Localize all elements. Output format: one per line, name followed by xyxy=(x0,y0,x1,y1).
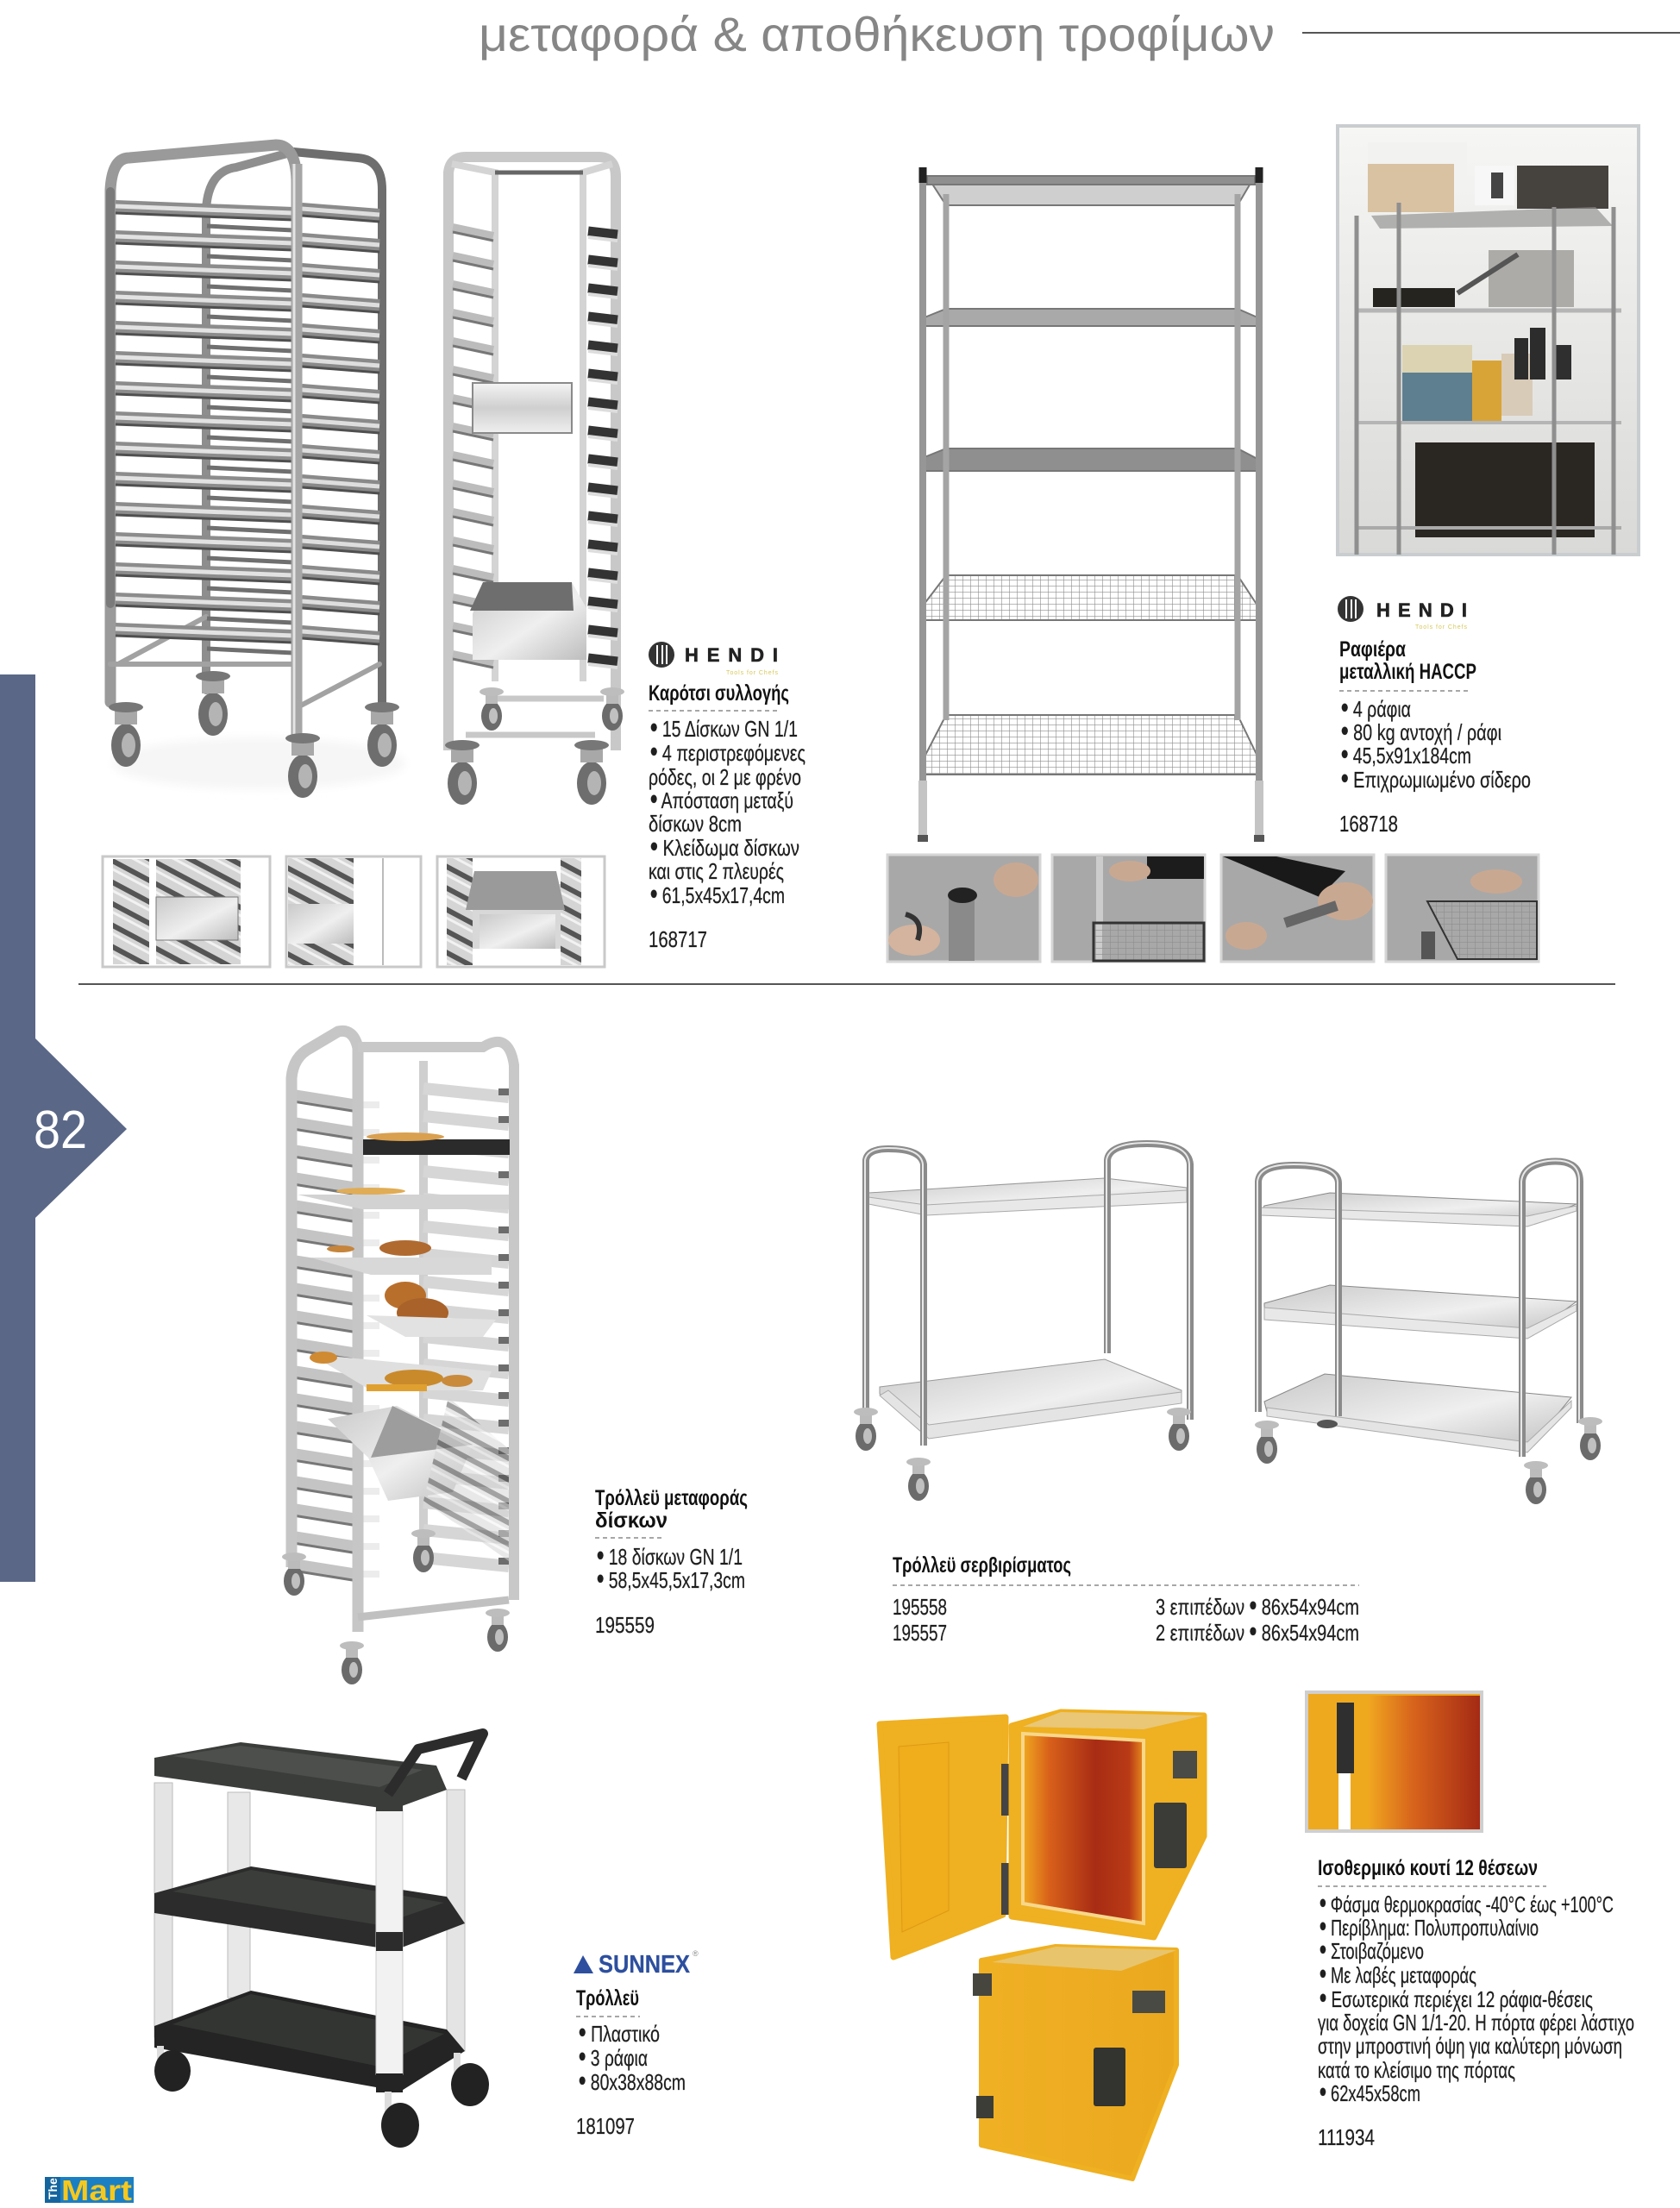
product photo: tray trolley with food xyxy=(282,1031,517,1684)
product description: 181097 xyxy=(576,2113,635,2139)
product description: • 61,5x45x17,4cm xyxy=(650,878,785,909)
product description: • 45,5x91x184cm xyxy=(1341,738,1471,769)
brand logo: SUNNEX: ® xyxy=(693,1949,699,1958)
product description: μεταλλική HACCP xyxy=(1339,660,1476,684)
logo: The Mart: Mart xyxy=(61,2174,132,2206)
product description and codes: 3 επιπέδων • 86x54x94cm xyxy=(1156,1590,1359,1621)
product description: • 3 ράφια xyxy=(579,2041,648,2072)
page number: 82 xyxy=(34,1101,87,1160)
product description xyxy=(649,681,806,952)
product description: • Στοιβαζόμενο xyxy=(1320,1934,1424,1965)
product photo: closed insulated box xyxy=(973,1947,1176,2179)
product description: • Πλαστικό xyxy=(579,2017,660,2048)
product photo: open insulated box xyxy=(880,1712,1204,1957)
product description: • 4 ράφια xyxy=(1341,692,1411,723)
page tab with page number xyxy=(0,674,127,1582)
product description: • Απόσταση μεταξύ xyxy=(650,783,793,814)
product description: ρόδες, οι 2 με φρένο xyxy=(649,764,801,790)
product description: • Επιχρωμιωμένο σίδερο xyxy=(1341,762,1531,794)
product description: • 80 kg αντοχή / ράφι xyxy=(1341,715,1501,746)
product description: και στις 2 πλευρές xyxy=(649,858,784,884)
product description: • Με λαβές μεταφοράς xyxy=(1320,1958,1476,1989)
logo: The Mart xyxy=(45,2174,134,2206)
brand logo: HENDI xyxy=(649,642,778,676)
brand logo: HENDI xyxy=(1338,596,1468,630)
product description: Ισοθερμικό κουτί 12 θέσεων xyxy=(1318,1856,1538,1880)
panel: tray trolley 195559 xyxy=(282,1031,748,1684)
product photo: cart side view xyxy=(109,145,405,798)
product description: • Κλείδωμα δίσκων xyxy=(650,831,799,862)
product description xyxy=(576,1986,686,2139)
product description: • 18 δίσκων GN 1/1 xyxy=(597,1540,743,1571)
brand logo: SUNNEX: SUNNEX xyxy=(599,1951,691,1979)
lifestyle photo of stocked shelves xyxy=(1338,126,1639,555)
product description: • 15 Δίσκων GN 1/1 xyxy=(650,712,798,743)
product description: • Εσωτερικά περιέχει 12 ράφια-θέσεις xyxy=(1320,1982,1593,2013)
product description: • 4 περιστρεφόμενες xyxy=(650,736,806,767)
product description: δίσκων xyxy=(595,1509,668,1533)
brand logo: HENDI: HENDI xyxy=(685,644,778,666)
product description xyxy=(1339,637,1531,837)
product description: Τρόλλεϋ μεταφοράς xyxy=(595,1486,748,1510)
product photo: three-level trolley xyxy=(1255,1161,1602,1504)
detail thumbnail: door seal xyxy=(1307,1692,1482,1831)
product description: • Περίβλημα: Πολυπροπυλαίνιο xyxy=(1320,1910,1539,1941)
logo: The Mart: The xyxy=(46,2178,60,2199)
product photo: wire shelving xyxy=(921,167,1261,842)
brand logo: HENDI: Tools for Chefs xyxy=(1415,624,1468,630)
product description: 168718 xyxy=(1339,811,1398,837)
assembly step thumbnails xyxy=(887,855,1539,962)
product description: 168717 xyxy=(649,926,707,952)
panel: serving trolleys 195558 / 195557 xyxy=(854,1143,1602,1647)
panel: collection cart 168717 xyxy=(103,145,806,967)
panel: metal shelving 168718 xyxy=(887,126,1639,962)
product description: Ραφιέρα xyxy=(1339,637,1406,662)
panel: plastic trolley 181097 xyxy=(154,1734,699,2148)
product description and codes: 195557 xyxy=(893,1620,947,1646)
title: μεταφορά & αποθήκευση τροφίμων xyxy=(479,7,1275,61)
product photo: two-level trolley xyxy=(854,1143,1191,1501)
product description: Καρότσι συλλογής xyxy=(649,681,789,706)
product description: Τρόλλεϋ xyxy=(576,1986,639,2010)
product description xyxy=(1318,1856,1634,2150)
product photo: black plastic trolley xyxy=(154,1734,489,2148)
product description and codes: 2 επιπέδων • 86x54x94cm xyxy=(1156,1615,1359,1647)
product photo: cart front view xyxy=(445,157,624,805)
product description: 111934 xyxy=(1318,2124,1375,2150)
panel: insulated box 111934 xyxy=(880,1692,1634,2179)
product description and codes xyxy=(893,1553,1359,1647)
product description and codes: Τρόλλεϋ σερβιρίσματος xyxy=(893,1553,1071,1578)
product description: 195559 xyxy=(595,1612,655,1638)
brand logo: HENDI: Tools for Chefs xyxy=(726,670,778,676)
product description: • 62x45x58cm xyxy=(1320,2076,1420,2107)
product description: • 58,5x45,5x17,3cm xyxy=(597,1563,745,1594)
product description and codes: 195558 xyxy=(893,1594,947,1620)
product description: δίσκων 8cm xyxy=(649,811,742,837)
detail thumbnails xyxy=(103,856,605,967)
product description: κατά το κλείσιμο της πόρτας xyxy=(1318,2057,1515,2083)
brand logo: HENDI: HENDI xyxy=(1376,599,1467,621)
product description: • 80x38x88cm xyxy=(579,2065,686,2096)
product description xyxy=(595,1486,748,1638)
